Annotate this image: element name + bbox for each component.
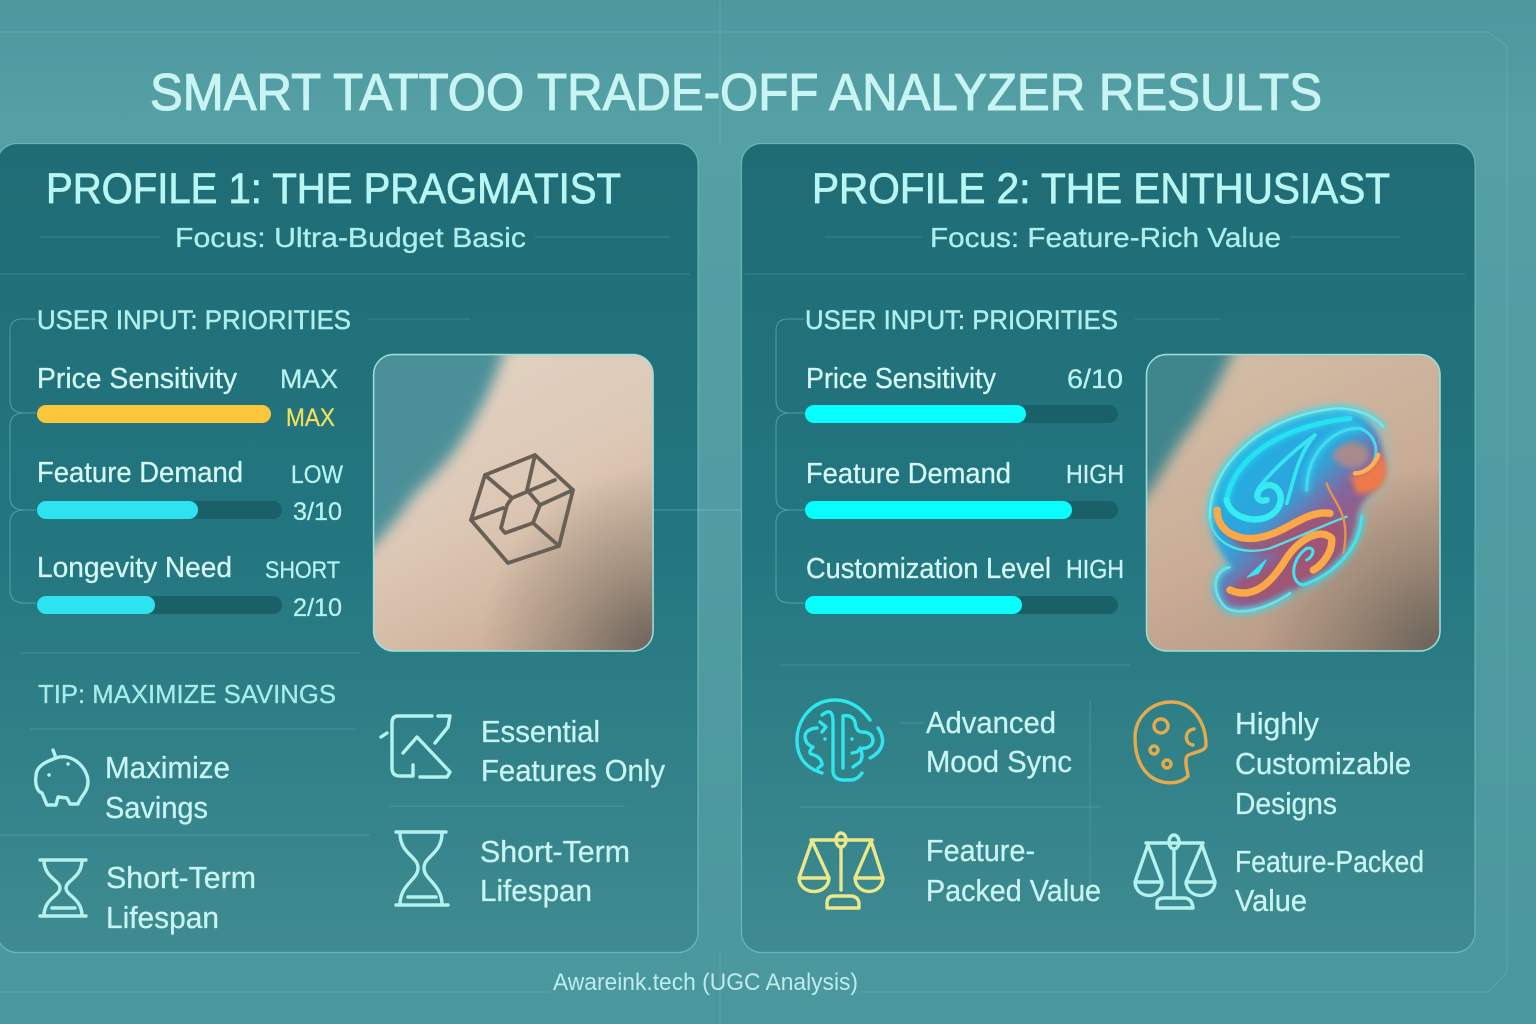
priority: feature demand high: [805, 458, 1124, 519]
text: essential features only: Essential: [481, 714, 600, 749]
swirl body: [1211, 410, 1384, 609]
text: maximize savings: [105, 750, 230, 825]
text: advanced mood sync: [926, 705, 1072, 779]
panel: profile 1 the pragmatist: [0, 144, 698, 952]
orange glow in right lobe: [1350, 452, 1387, 494]
text: feature-packed value: Packed Value: [926, 873, 1101, 908]
icon: palette: [1135, 702, 1206, 783]
text: highly customizable designs: Highly: [1235, 706, 1319, 741]
user input priorities heading 2: USER INPUT: PRIORITIES: [805, 305, 1118, 335]
text: short-term lifespan: Lifespan: [106, 900, 219, 935]
text: essential features only: Features Only: [481, 753, 665, 788]
priority: price sensitivity 6/10: Price Sensitivity: [806, 363, 996, 395]
text: maximize savings: Savings: [105, 790, 208, 825]
profile 1 focus subtitle: Focus: Ultra-Budget Basic: [175, 222, 526, 253]
photo: arm with minimal hexagon tattoo: [372, 354, 654, 652]
text: essential features only: [481, 714, 665, 788]
text: feature-packed value 2: Feature-Packed: [1235, 844, 1424, 879]
icon: hexagon cube tattoo: [471, 455, 573, 563]
priority: longevity need: Longevity Need: [37, 552, 232, 584]
footer credit: Awareink.tech (UGC Analysis): [553, 969, 858, 996]
priority: price sensitivity: [37, 363, 338, 432]
swirl glow strokes: [1210, 408, 1383, 611]
text: feature-packed value: [926, 833, 1101, 908]
text: maximize savings: Maximize: [105, 750, 230, 785]
text: feature-packed value 2: Value: [1235, 883, 1307, 918]
priority: longevity need: [37, 552, 342, 622]
priority: customization level high: Customization Level: [806, 553, 1051, 585]
icon: white scales: [1135, 835, 1215, 908]
title: SMART TATTOO TRADE-OFF ANALYZER RESULTS: [150, 64, 1322, 122]
text: advanced mood sync: Mood Sync: [926, 744, 1072, 779]
priority: customization level high: HIGH: [1066, 554, 1124, 584]
priority: price sensitivity: MAX: [280, 364, 338, 394]
icon: brain: [797, 700, 883, 780]
priority: price sensitivity 6/10: [805, 363, 1123, 423]
priority: longevity need: SHORT: [265, 557, 340, 584]
priority: feature demand high: Feature Demand: [806, 458, 1011, 490]
soft glow under swirl: [1210, 408, 1387, 612]
text: highly customizable designs: Customizable: [1235, 746, 1411, 781]
priority: longevity need: 2/10: [293, 594, 342, 622]
bracket connector: [10, 319, 36, 603]
icon: piggy bank: [36, 750, 88, 805]
priority: feature demand high: HIGH: [1066, 459, 1124, 489]
skin notch in upper right lobe: [1332, 442, 1368, 468]
profile 2 heading: PROFILE 2: THE ENTHUSIAST: [812, 165, 1390, 213]
text: feature-packed value 2: [1235, 844, 1424, 918]
user input priorities heading: USER INPUT: PRIORITIES: [37, 305, 351, 335]
priority: price sensitivity 6/10: 6/10: [1067, 364, 1123, 394]
bracket connector 2: [776, 319, 805, 603]
tip heading: TIP: MAXIMIZE SAVINGS: [38, 679, 336, 709]
priority: feature demand: LOW: [291, 461, 343, 489]
icon: yellow scales: [799, 833, 883, 908]
priority: price sensitivity: MAX: [286, 404, 335, 432]
text: highly customizable designs: Designs: [1235, 786, 1337, 821]
text: highly customizable designs: [1235, 706, 1411, 821]
mauve lower swirl: [1220, 513, 1343, 601]
icon: hourglass: [40, 860, 86, 916]
panel: profile 2 the enthusiast: [742, 144, 1475, 952]
text: feature-packed value: Feature-: [926, 833, 1035, 868]
profile 2 focus subtitle: Focus: Feature-Rich Value: [930, 222, 1281, 253]
priority: feature demand: [37, 457, 343, 526]
icon: hourglass 2: [396, 832, 448, 905]
icon: essential features arrow: [381, 716, 450, 777]
text: short-term lifespan: Short-Term: [106, 860, 256, 895]
priority: feature demand: 3/10: [293, 498, 342, 526]
priority: customization level high: [805, 553, 1124, 614]
priority: price sensitivity: Price Sensitivity: [37, 363, 237, 395]
text: advanced mood sync: Advanced: [926, 705, 1056, 740]
photo: arm with glowing swirl tattoo: [1146, 354, 1441, 652]
text: short-term lifespan 2: Short-Term: [480, 834, 630, 869]
connector between profiles: [653, 509, 780, 511]
priority: feature demand: Feature Demand: [37, 457, 243, 489]
text: short-term lifespan 2: Lifespan: [480, 873, 592, 908]
text: short-term lifespan 2: [480, 834, 630, 908]
text: short-term lifespan: [106, 860, 256, 935]
profile 1 heading: PROFILE 1: THE PRAGMATIST: [46, 165, 621, 213]
